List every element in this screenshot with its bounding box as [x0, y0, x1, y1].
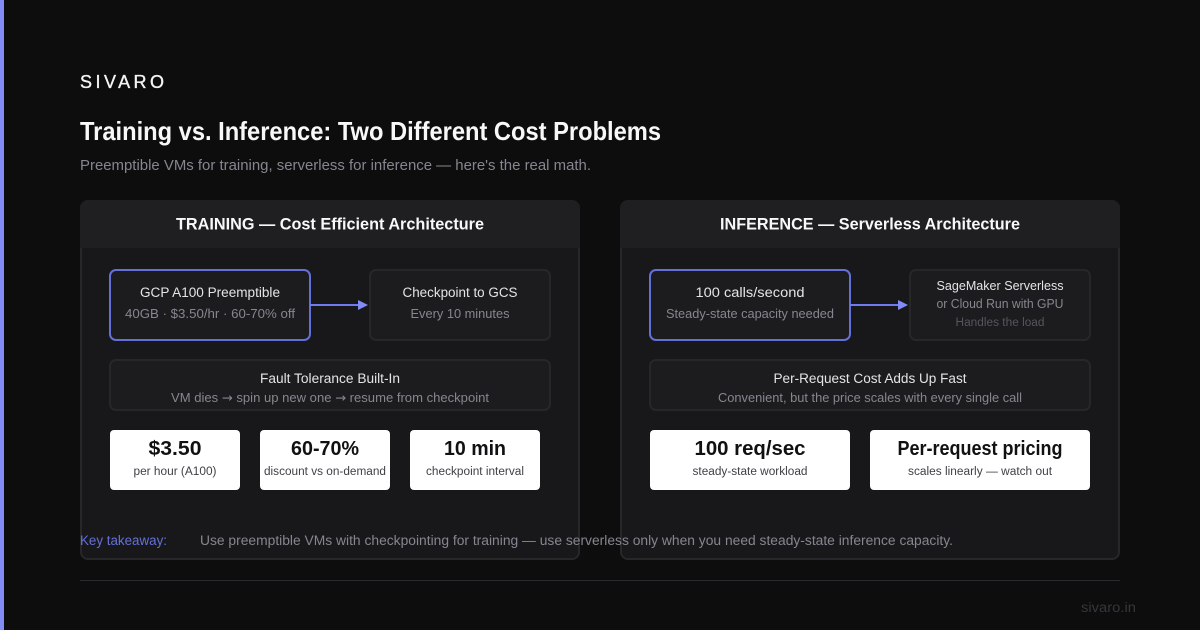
node: 100 calls/second [650, 270, 850, 340]
panel header: training: TRAINING — Cost Efficient Architecture [176, 214, 484, 234]
footer url: sivaro.in [1081, 600, 1136, 615]
node: SageMaker Serverless: Handles the load [956, 317, 1044, 329]
node: SageMaker Serverless: SageMaker Serverless [936, 278, 1064, 293]
node: 100 calls/second: 100 calls/second [696, 285, 804, 300]
node: Fault Tolerance: VM dies → spin up new one → resume from checkpoint [171, 390, 490, 405]
node: Fault Tolerance: Fault Tolerance Built-In [260, 371, 400, 386]
node: Checkpoint to GCS: Every 10 minutes [410, 307, 510, 321]
panel header: training [80, 200, 580, 248]
stat: 10 min: checkpoint interval [426, 466, 524, 478]
subtitle: Preemptible VMs for training, serverless for inference — here's the real math. [80, 158, 591, 174]
node: GCP A100 Preemptible: 40GB · $3.50/hr · 60-70% off [125, 307, 296, 321]
panel: training [80, 200, 580, 559]
stat: $3.50 [110, 430, 240, 490]
arrow: preemptible to checkpoint [310, 300, 368, 310]
node: SageMaker Serverless [910, 270, 1090, 340]
stat: 100 req/sec [650, 430, 850, 490]
panel: inference [620, 200, 1120, 559]
node: Checkpoint to GCS: Checkpoint to GCS [402, 285, 518, 300]
node: Checkpoint to GCS [370, 270, 550, 340]
title: Training vs. Inference: Two Different Cost Problems [80, 116, 661, 146]
node: GCP A100 Preemptible: GCP A100 Preemptible [140, 285, 280, 300]
node: 100 calls/second: Steady-state capacity needed [666, 307, 834, 321]
node: Fault Tolerance [110, 360, 550, 410]
node: Per-Request Cost: Per-Request Cost Adds Up Fast [774, 371, 967, 386]
stat: Per-request pricing [870, 430, 1090, 490]
stat: $3.50: per hour (A100) [134, 466, 217, 478]
stat: 60-70%: 60-70% [291, 438, 359, 460]
stat: 10 min: 10 min [444, 438, 506, 460]
key takeaway: Key takeaway: [80, 533, 167, 548]
panel header: inference: INFERENCE — Serverless Architecture [720, 214, 1020, 234]
stat: $3.50: $3.50 [148, 438, 202, 460]
node: SageMaker Serverless: or Cloud Run with GPU [936, 297, 1064, 311]
arrow: calls to serverless [850, 300, 908, 310]
node: Per-Request Cost [650, 360, 1090, 410]
accent bar [0, 0, 4, 630]
stat: Per-request pricing: scales linearly — watch out [908, 466, 1053, 478]
key takeaway: Use preemptible VMs with checkpointing for training — use serverless only when you need steady-state inference capacity. [200, 533, 953, 548]
stat: 60-70%: discount vs on-demand [264, 466, 386, 478]
stat: 60-70% [260, 430, 390, 490]
node: Per-Request Cost: Convenient, but the price scales with every single call [718, 391, 1022, 405]
panel header: inference [620, 200, 1120, 248]
node: GCP A100 Preemptible [110, 270, 310, 340]
logo: SIVARO [80, 72, 164, 92]
stat: 10 min [410, 430, 540, 490]
stat: 100 req/sec: steady-state workload [692, 466, 808, 478]
stat: Per-request pricing: Per-request pricing [898, 438, 1062, 460]
stat: 100 req/sec: 100 req/sec [694, 438, 806, 460]
